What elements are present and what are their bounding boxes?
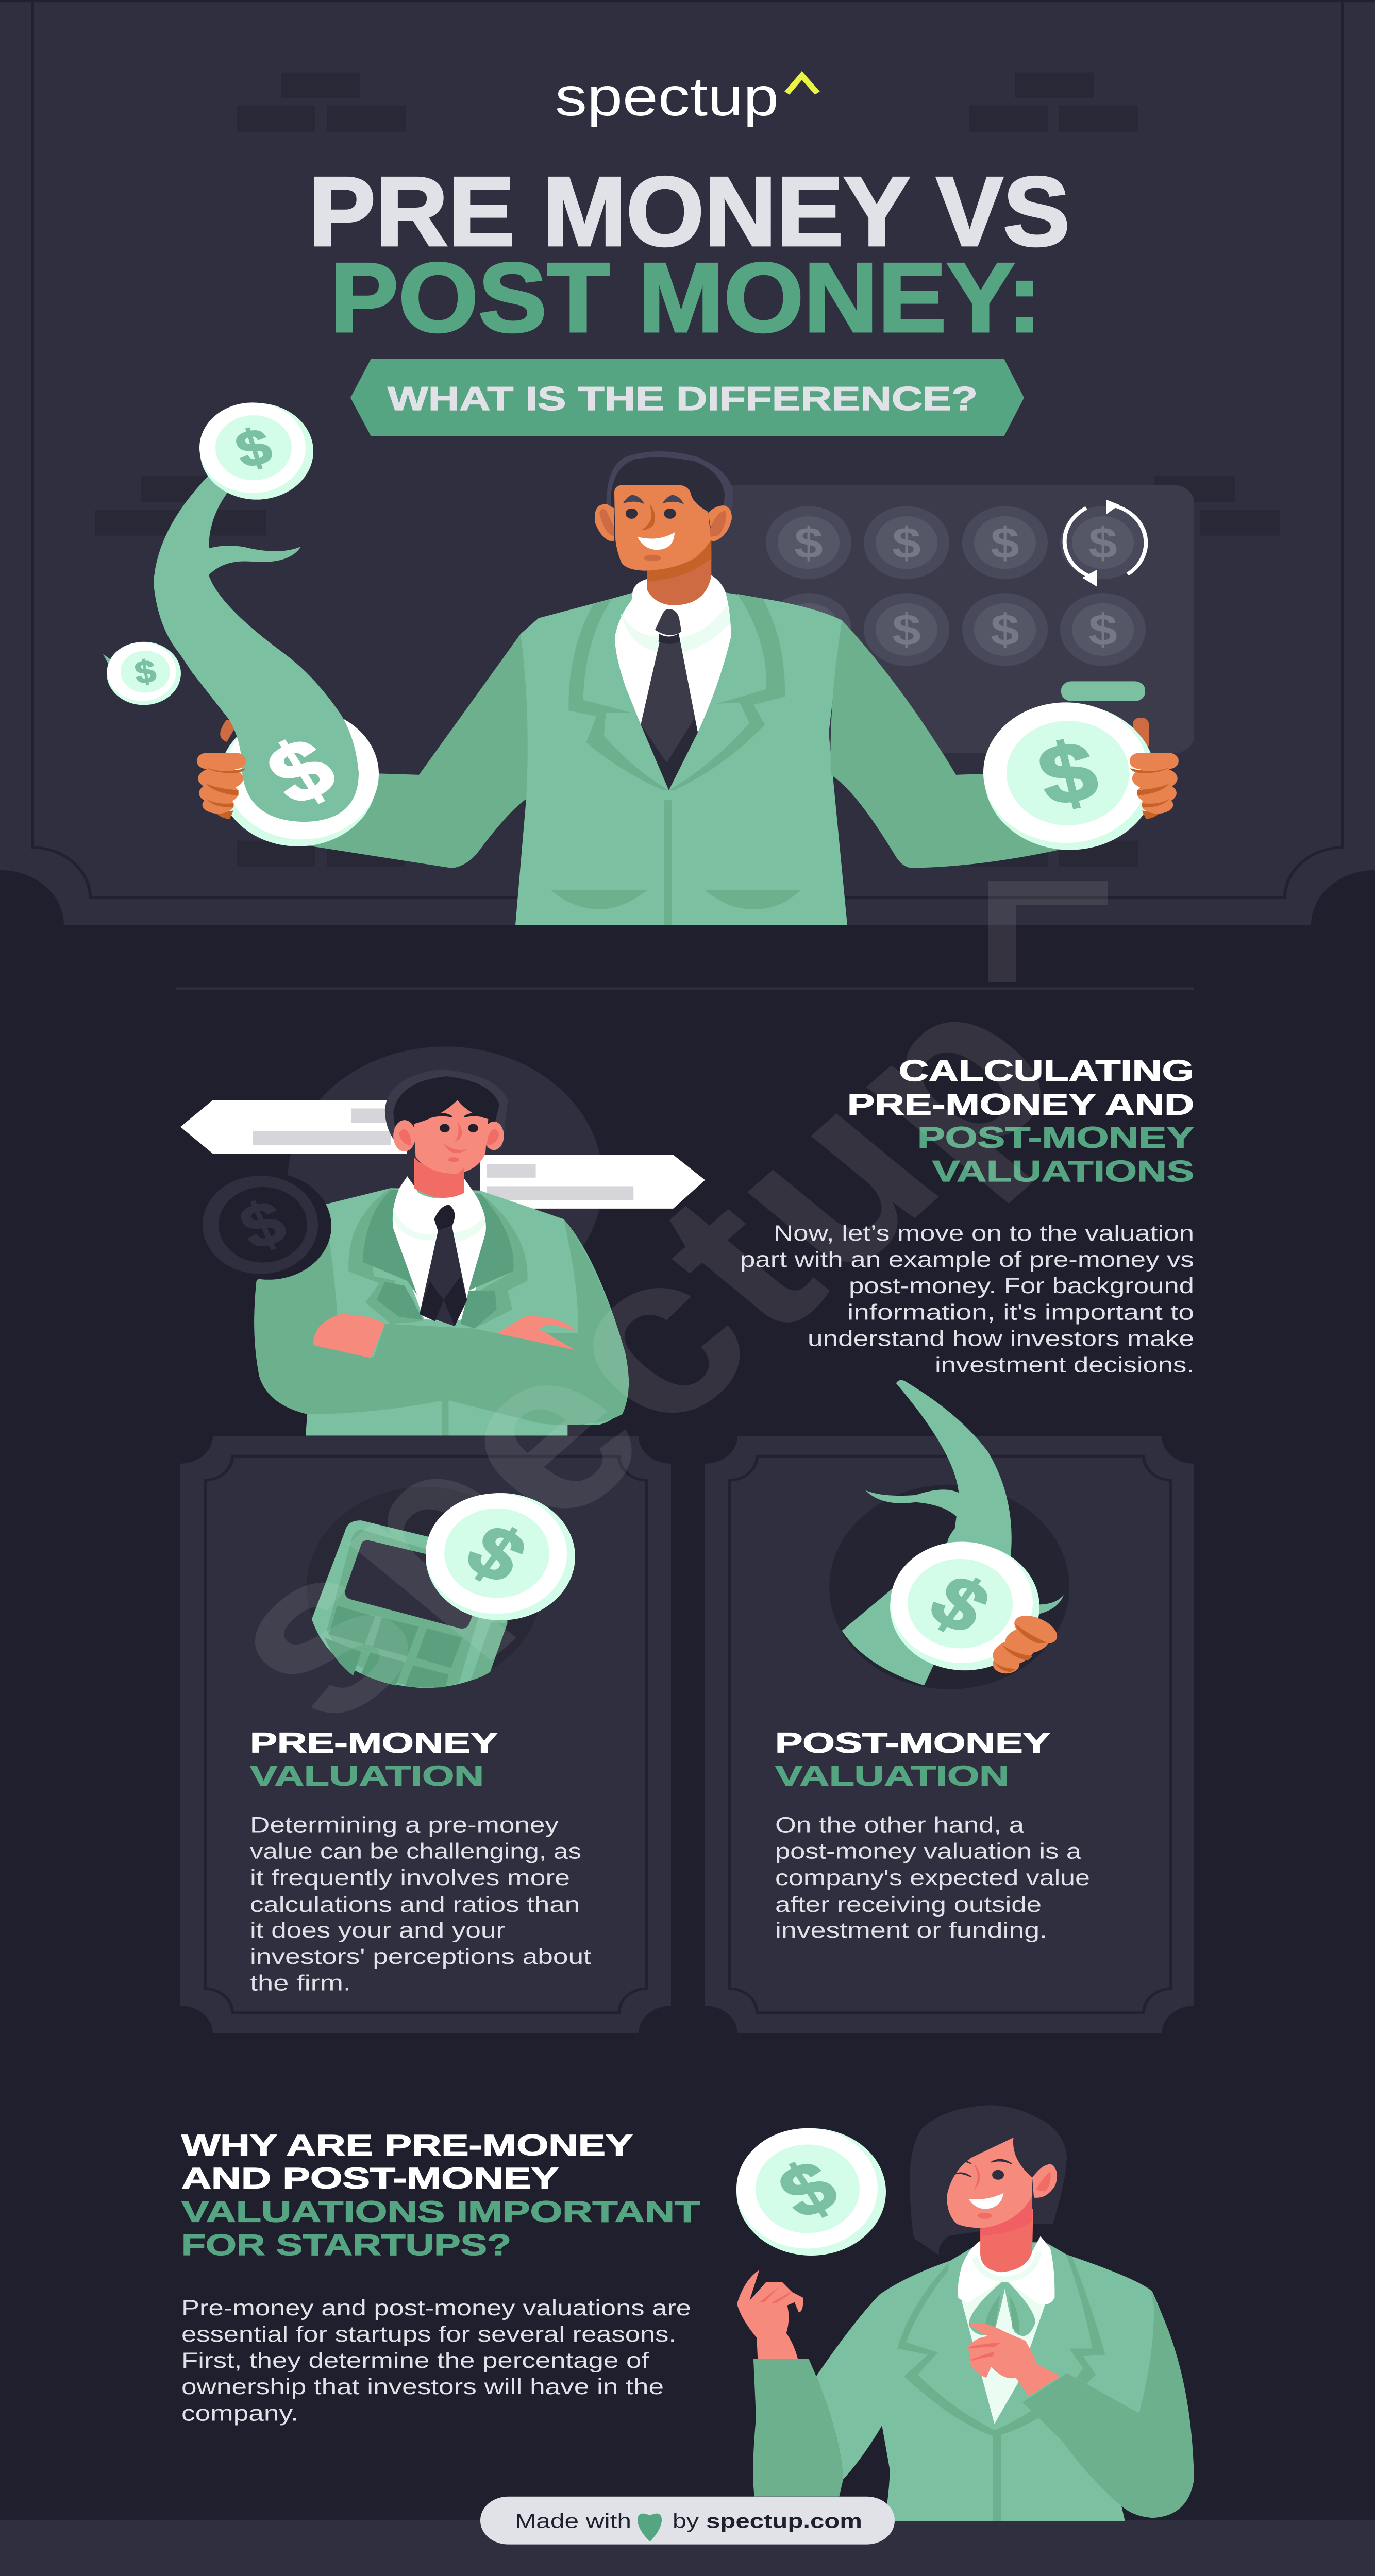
subtitle ribbon: WHAT IS THE DIFFERENCE? (388, 380, 978, 417)
text: pre-money card copy: it frequently involves more (250, 1865, 570, 1890)
panel: hero header (0, 0, 1375, 925)
icon: small floating coin (103, 642, 181, 705)
panel: coin board behind man: $ (794, 605, 823, 654)
icon: coin top of vine (199, 402, 313, 500)
text: post-money card copy: post-money valuation is a (775, 1839, 1081, 1863)
panel: post-money card (705, 1436, 1194, 2033)
panel: coin board behind man: $ (1088, 605, 1117, 654)
icon: dark coin beside man: $ (230, 1187, 295, 1263)
text: calculating intro: Now, let’s move on to the valuation (774, 1221, 1194, 1245)
heading: why important: WHY ARE PRE-MONEY (181, 2129, 633, 2162)
icon: calculator coin (426, 1493, 575, 1620)
text: post-money card copy (775, 1727, 1090, 1942)
text: why important body: First, they determine the percentage of (181, 2348, 649, 2372)
text: post-money card copy: after receiving outside (775, 1892, 1042, 1917)
heading: calculating valuations (847, 1055, 1194, 1188)
vine and left hand thumb: $ (251, 719, 351, 823)
heading: why important: FOR STARTUPS? (181, 2229, 511, 2262)
icon: coin top of vine: $ (229, 417, 278, 479)
logo: spectup: spectup (555, 67, 779, 127)
icon: coin beside woman: $ (765, 2144, 851, 2234)
text: post-money card copy: VALUATION (775, 1760, 1009, 1791)
text: calculating intro: post-money. For background (849, 1274, 1194, 1298)
text: pre-money card copy: it does your and your (250, 1918, 505, 1942)
heading: calculating valuations: PRE-MONEY AND (847, 1089, 1194, 1121)
panel: coin board behind man: $ (1088, 518, 1117, 567)
watermark: spectup: spectup (156, 935, 1116, 1769)
icon: calculator (307, 1487, 542, 1688)
text: post-money card copy: investment or funding. (775, 1918, 1047, 1942)
heading: why important: AND POST-MONEY (181, 2162, 559, 2195)
man head and shirt (568, 451, 785, 790)
title: PRE MONEY VS (309, 157, 1070, 267)
text: why important body: ownership that investors will have in the (181, 2375, 664, 2399)
footer badge (480, 2497, 895, 2545)
panel: coin board behind man: $ (991, 518, 1019, 567)
text: post-money card copy: company's expected value (775, 1865, 1090, 1890)
title (309, 157, 1070, 353)
text: calculating intro (740, 1221, 1194, 1377)
text: pre-money card copy: calculations and ratios than (250, 1892, 580, 1917)
panel: pre-money card (180, 1436, 671, 2033)
heading: calculating valuations: POST-MONEY (917, 1122, 1194, 1154)
panel: coin board behind man (670, 485, 1194, 753)
icon: small floating coin: $ (132, 653, 159, 691)
divider (176, 987, 1194, 990)
text: pre-money card copy: VALUATION (250, 1760, 484, 1791)
heading: calculating valuations: CALCULATING (899, 1055, 1194, 1088)
illustration: man with coins (103, 402, 1179, 925)
illustration: man with crossed arms and signs (180, 1046, 705, 1435)
text: why important body: company. (181, 2401, 298, 2426)
panel: coin board behind man: $ (794, 518, 823, 567)
panel: coin board behind man: $ (991, 605, 1019, 654)
text: why important body (181, 2295, 691, 2426)
text: why important body: essential for startups for several reasons. (181, 2321, 676, 2346)
text: calculating intro: information, it's important to (847, 1300, 1194, 1325)
icon: left hand fingers (197, 753, 246, 819)
title: POST MONEY: (330, 243, 1042, 353)
footer badge: spectup.com (706, 2510, 862, 2532)
text: pre-money card copy: PRE-MONEY (250, 1727, 498, 1758)
vine and left hand thumb (154, 476, 379, 846)
icon: post-money coin and hand: $ (915, 1559, 1005, 1649)
footer badge: by (673, 2510, 699, 2532)
heading: why important (181, 2129, 700, 2262)
icon: coin beside woman (736, 2128, 886, 2256)
footer band (0, 2520, 1375, 2576)
icon: right hand fingers (1130, 753, 1179, 819)
heading: calculating valuations: VALUATIONS (932, 1155, 1194, 1188)
icon: calculator coin: $ (451, 1509, 542, 1599)
heading: why important: VALUATIONS IMPORTANT (181, 2196, 700, 2228)
text: pre-money card copy: Determining a pre-money (250, 1812, 559, 1837)
text: pre-money card copy: investors' perceptions about (250, 1944, 591, 1969)
text: pre-money card copy (250, 1727, 591, 1995)
icon: post-money vine and sleeve (829, 1380, 1069, 1689)
panel: coin board behind man: $ (892, 518, 921, 567)
icon: coin held in right hand: $ (1030, 723, 1106, 824)
illustration: woman with coin (737, 2105, 1194, 2521)
text: pre-money card copy: value can be challenging, as (250, 1839, 581, 1863)
footer badge: Made with (515, 2510, 631, 2532)
icon: dark coin beside man (203, 1173, 331, 1280)
icon: coin held in right hand (983, 702, 1155, 850)
subtitle ribbon (350, 359, 1024, 436)
text: why important body: Pre-money and post-money valuations are (181, 2295, 691, 2320)
text: pre-money card copy: the firm. (250, 1971, 351, 1995)
text: calculating intro: part with an example of pre-money vs (740, 1247, 1194, 1272)
text: calculating intro: investment decisions. (935, 1352, 1194, 1377)
icon: refresh arrows (1065, 500, 1146, 586)
icon: post-money coin and hand (890, 1542, 1063, 1673)
text: calculating intro: understand how investors make (808, 1326, 1194, 1351)
text: post-money card copy: On the other hand, a (775, 1812, 1024, 1837)
panel: coin board behind man: $ (892, 605, 921, 654)
text: post-money card copy: POST-MONEY (775, 1727, 1050, 1758)
